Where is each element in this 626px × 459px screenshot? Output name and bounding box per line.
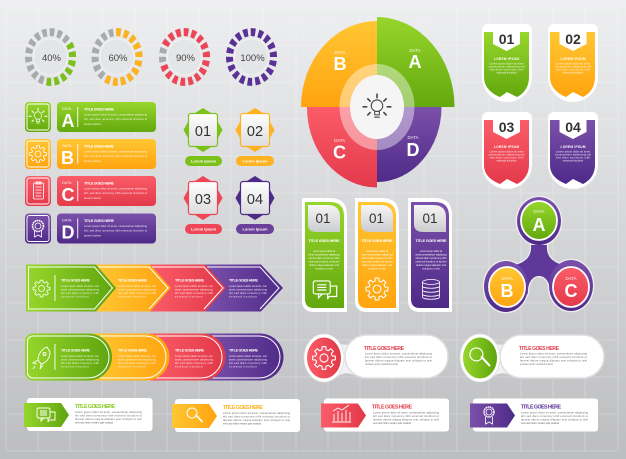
callout pill red: laoreet dolore magna aliquam erat volutpat ut wisi (365, 358, 432, 362)
rounded process (25, 334, 283, 380)
shield card 01: 01 (499, 31, 514, 47)
tall card orange: elit sed diam nonummy nibh (362, 256, 393, 260)
shield card 02: euismod tincidunt (563, 70, 583, 74)
tag card purple: laoreet dolore magna aliquam erat volutpat ut wisi (521, 418, 588, 422)
gauge: 40%: 40% (42, 53, 62, 64)
row D: data bar: DATA (62, 218, 72, 222)
spinner diagram: C (564, 281, 578, 301)
rounded process: Lorem ipsum dolor sit amet, con (229, 354, 268, 358)
rounded process: euismod tincidunt (118, 364, 146, 368)
shield card 01: euismod tincidunt (496, 70, 517, 74)
tag card red: elit sed diam nonummy nibh euismod tincidunt ut (373, 414, 439, 418)
row B: data bar: laoreet dolore (84, 159, 102, 163)
tag card red: TITLE GOES HERE (372, 404, 412, 410)
row C: data bar: laoreet dolore (84, 196, 102, 200)
arrow process: euismod tincidunt (118, 294, 146, 298)
tag card purple: elit sed diam nonummy nibh euismod tincidunt ut (521, 414, 588, 418)
tall card green: euismod tincidunt ut laoreet (308, 260, 340, 264)
row A: data bar: laoreet dolore (84, 122, 102, 126)
tag card green: enim ad minim veniam quis nostrud (75, 420, 114, 424)
shield card 03: sed diam nonummy nibh (490, 156, 524, 160)
tall card green: Lorem ipsum dolor sit (313, 249, 335, 253)
tag card purple (470, 398, 598, 432)
row C: data bar (25, 176, 156, 206)
rounded process: Lorem ipsum dolor sit amet, con (118, 354, 157, 358)
gauge: 90% (155, 23, 214, 91)
row C: data bar: elit, sed diam nonummy nibh euismod tincidunt ut (84, 191, 147, 195)
badge 04: 04 (247, 192, 263, 208)
tall card green: TITLE GOES HERE (308, 239, 340, 243)
spinner diagram: A (532, 215, 546, 235)
badge 04 (236, 176, 274, 234)
shield card 01: Lorem ipsum dolor sit amet (490, 62, 524, 66)
tall card orange: Lorem ipsum dolor sit (366, 249, 388, 253)
callout pill green: Lorem ipsum dolor sit amet, consectetuer adipiscing (520, 352, 588, 356)
tall card orange: volutpat ut wisi (368, 266, 386, 270)
pie chart (301, 17, 454, 188)
spinner diagram: DATA (565, 276, 577, 281)
badge 02 (236, 108, 274, 166)
row C: data bar: Lorem ipsum dolor sit amet, consectetuer adipiscing (84, 186, 148, 190)
tall card purple: 01 (422, 211, 438, 226)
pie chart: DATA (334, 138, 345, 143)
shield card 03: 03 (499, 119, 514, 135)
badge 03 (184, 176, 222, 234)
rounded process: amet consectetuer adipiscing (175, 358, 214, 362)
tall card purple: TITLE GOES HERE (416, 239, 447, 243)
tag card green: TITLE GOES HERE (75, 404, 115, 410)
shield card 04: 04 (565, 119, 581, 135)
row B: data bar: B (61, 148, 74, 168)
badge 02: 02 (247, 124, 263, 140)
arrow process: Lorem ipsum dolor sit amet, con (229, 284, 268, 288)
rounded process: amet consectetuer adipiscing (61, 358, 100, 362)
tall card green: volutpat ut wisi (315, 266, 333, 270)
rounded process: euismod tincidunt (175, 364, 203, 368)
arrow process: elit sed diam nonummy nibh (118, 291, 157, 295)
spinner diagram: DATA (533, 209, 545, 214)
pie chart: C (333, 142, 346, 162)
gauge: 90%: 90% (176, 53, 196, 64)
tall card orange: amet consectetuer adipiscing (362, 252, 393, 256)
tag card green (24, 398, 152, 431)
arrow process: euismod tincidunt (175, 294, 203, 298)
callout pill green: TITLE GOES HERE (519, 346, 560, 352)
arrow process: elit sed diam nonummy nibh (229, 291, 268, 295)
shield card 01: consectetuer adipiscing elit (488, 64, 525, 68)
arrow process: elit sed diam nonummy nibh (61, 291, 100, 295)
tall card purple: Lorem ipsum dolor sit (420, 249, 442, 253)
arrow process (26, 264, 283, 312)
spinner diagram: DATA (501, 276, 513, 281)
rounded process: TITLE GOES HERE (61, 348, 91, 352)
tall card green (302, 198, 347, 312)
tall card green: elit sed diam nonummy nibh (308, 256, 340, 260)
shield card 02: consectetuer adipiscing elit (555, 64, 591, 68)
rounded process: elit sed diam nonummy nibh (175, 361, 214, 365)
row D: data bar: laoreet dolore (84, 234, 102, 238)
rounded process: Lorem ipsum dolor sit amet, con (61, 354, 100, 358)
shield card 04: sed diam nonummy nibh (556, 156, 591, 160)
tall card purple (408, 198, 452, 312)
row C: data bar: TITLE GOES HERE (84, 182, 115, 186)
tall card purple: volutpat ut wisi (422, 266, 440, 270)
badge 03: 03 (195, 192, 211, 208)
shield card 04: euismod tincidunt (563, 158, 583, 162)
shield card 01: LOREM IPSUM (494, 57, 519, 61)
row B: data bar: DATA (62, 144, 72, 148)
row B: data bar (25, 139, 156, 169)
row A: data bar: TITLE GOES HERE (84, 108, 115, 112)
callout pill red: Lorem ipsum dolor sit amet, consectetuer adipiscing (365, 352, 433, 356)
arrow process: Lorem ipsum dolor sit amet, con (118, 284, 157, 288)
pie chart: D (406, 140, 420, 160)
tag card purple: enim ad minim veniam quis nostrud (521, 421, 560, 425)
tall card purple: elit sed diam nonummy nibh (416, 256, 447, 260)
row C: data bar: DATA (62, 181, 72, 185)
tag card red (321, 398, 449, 432)
callout pill red: elit sed diam nonummy nibh euismod tincidunt ut (365, 355, 432, 359)
badge 01: Lorem Ipsum (191, 158, 216, 164)
callout pill green (460, 334, 604, 382)
row A: data bar: elit, sed diam nonummy nibh euismod tincidunt ut (84, 117, 147, 121)
arrow process: TITLE GOES HERE (118, 278, 148, 282)
arrow process: TITLE GOES HERE (61, 278, 91, 282)
row D: data bar (25, 214, 156, 244)
shield card 03 (482, 112, 532, 189)
badge 04: Lorem Ipsum (242, 226, 268, 232)
rounded process: euismod tincidunt (229, 364, 257, 368)
rounded process: elit sed diam nonummy nibh (61, 361, 100, 365)
pie chart: DATA (334, 50, 346, 55)
shield card 04 (548, 112, 598, 189)
shield card 03: LOREM IPSUM (494, 145, 519, 149)
tall card purple: amet consectetuer adipiscing (416, 252, 447, 256)
rounded process: amet consectetuer adipiscing (118, 358, 157, 362)
callout pill green: laoreet dolore magna aliquam erat volutpat ut wisi (520, 358, 587, 362)
arrow process: amet consectetuer adipiscing (118, 288, 157, 292)
tag card red: Lorem ipsum dolor sit amet, consectetuer adipiscing (373, 410, 440, 414)
row B: data bar: elit, sed diam nonummy nibh euismod tincidunt ut (84, 154, 147, 158)
tag card orange: TITLE GOES HERE (223, 405, 263, 411)
tag card red: enim ad minim veniam quis nostrud (373, 421, 412, 425)
shield card 04: consectetuer adipiscing elit (555, 152, 591, 156)
badge 01: 01 (195, 124, 211, 140)
tag card green: laoreet dolore magna aliquam erat volutpat ut wisi (75, 417, 142, 421)
row D: data bar: TITLE GOES HERE (84, 219, 115, 223)
arrow process: amet consectetuer adipiscing (229, 288, 268, 292)
row A: data bar: DATA (62, 107, 72, 111)
gauge: 60%: 60% (108, 53, 128, 64)
rounded process: elit sed diam nonummy nibh (118, 361, 157, 365)
row D: data bar: D (62, 222, 74, 242)
tall card purple: dolore magna aliquam erat (416, 263, 446, 267)
tag card green: elit sed diam nonummy nibh euismod tincidunt ut (75, 414, 142, 418)
shield card 01 (482, 24, 532, 102)
tall card purple: euismod tincidunt ut laoreet (416, 260, 447, 264)
arrow process: euismod tincidunt (229, 294, 257, 298)
row A: data bar: A (62, 111, 74, 131)
tall card green: 01 (315, 211, 331, 226)
pie chart: DATA (409, 48, 421, 53)
rounded process: euismod tincidunt (61, 364, 89, 368)
spinner diagram: B (500, 281, 514, 301)
tag card orange: Lorem ipsum dolor sit amet, consectetuer adipiscing (223, 411, 291, 415)
tall card orange: euismod tincidunt ut laoreet (362, 260, 393, 264)
tag card green: Lorem ipsum dolor sit amet, consectetuer adipiscing (75, 410, 143, 414)
gauge: 100%: 100% (240, 53, 265, 64)
rounded process: TITLE GOES HERE (175, 348, 205, 352)
pie chart: B (334, 54, 346, 74)
row D: data bar: Lorem ipsum dolor sit amet, consectetuer adipiscing (84, 224, 148, 228)
callout pill red: veniam quis nostrud exerci (365, 362, 398, 366)
rounded process: Lorem ipsum dolor sit amet, con (175, 354, 214, 358)
badge 02: Lorem Ipsum (242, 158, 268, 164)
row D: data bar: elit, sed diam nonummy nibh euismod tincidunt ut (84, 228, 147, 232)
gauge: 60% (94, 31, 140, 83)
shield card 04: Lorem ipsum dolor sit amet (556, 150, 590, 154)
tag card orange: laoreet dolore magna aliquam erat volutpat ut wisi (223, 418, 290, 422)
arrow process: elit sed diam nonummy nibh (175, 291, 214, 295)
row A: data bar (25, 102, 156, 132)
arrow process: euismod tincidunt (61, 294, 89, 298)
callout pill green: elit sed diam nonummy nibh euismod tincidunt ut (520, 355, 587, 359)
arrow process: Lorem ipsum dolor sit amet, con (175, 284, 214, 288)
shield card 03: consectetuer adipiscing elit (488, 152, 525, 156)
tall card orange: TITLE GOES HERE (362, 239, 393, 243)
tag card purple: Lorem ipsum dolor sit amet, consectetuer adipiscing (521, 410, 589, 414)
rounded process: elit sed diam nonummy nibh (229, 361, 268, 365)
pie chart: A (408, 52, 422, 72)
shield card 02: Lorem ipsum dolor sit amet (556, 62, 590, 66)
spinner diagram (484, 197, 593, 312)
row B: data bar: TITLE GOES HERE (84, 144, 115, 148)
tag card orange: elit sed diam nonummy nibh euismod tincidunt ut (223, 414, 290, 418)
tag card red: laoreet dolore magna aliquam erat volutpat ut wisi (373, 418, 439, 422)
arrow process: Lorem ipsum dolor sit amet, con (61, 284, 100, 288)
gauge: 40% (20, 23, 81, 91)
shield card 04: LOREM IPSUM (560, 145, 586, 149)
pie chart: DATA (407, 135, 419, 140)
callout pill green: veniam quis nostrud exerci (520, 362, 553, 366)
shield card 02 (548, 24, 598, 102)
tall card orange: 01 (369, 211, 384, 226)
arrow process: amet consectetuer adipiscing (61, 288, 100, 292)
tall card green: amet consectetuer adipiscing (308, 252, 340, 256)
tall card orange: dolore magna aliquam erat (362, 263, 392, 267)
badge 01 (184, 108, 222, 166)
shield card 03: Lorem ipsum dolor sit amet (490, 150, 524, 154)
shield card 02: LOREM IPSUM (560, 57, 586, 61)
rounded process: TITLE GOES HERE (229, 348, 259, 352)
shield card 03: euismod tincidunt (496, 158, 517, 162)
shield card 02: sed diam nonummy nibh (556, 68, 591, 72)
badge 03: Lorem Ipsum (191, 226, 216, 232)
tall card orange (355, 198, 399, 312)
arrow process: TITLE GOES HERE (175, 278, 205, 282)
shield card 02: 02 (565, 31, 581, 47)
rounded process: amet consectetuer adipiscing (229, 358, 268, 362)
gauge: 100% (229, 31, 274, 83)
arrow process: amet consectetuer adipiscing (175, 288, 214, 292)
callout pill red: TITLE GOES HERE (364, 346, 405, 352)
tall card green: dolore magna aliquam erat (309, 263, 339, 267)
row C: data bar: C (62, 185, 74, 205)
shield card 01: sed diam nonummy nibh (490, 68, 524, 72)
arrow process: TITLE GOES HERE (229, 278, 259, 282)
tag card purple: TITLE GOES HERE (521, 404, 561, 410)
row A: data bar: Lorem ipsum dolor sit amet, consectetuer adipiscing (84, 112, 148, 116)
tag card orange: enim ad minim veniam quis nostrud (223, 422, 262, 426)
row B: data bar: Lorem ipsum dolor sit amet, consectetuer adipiscing (84, 150, 148, 154)
rounded process: TITLE GOES HERE (118, 348, 148, 352)
callout pill red (304, 334, 448, 382)
tag card orange (172, 399, 300, 432)
